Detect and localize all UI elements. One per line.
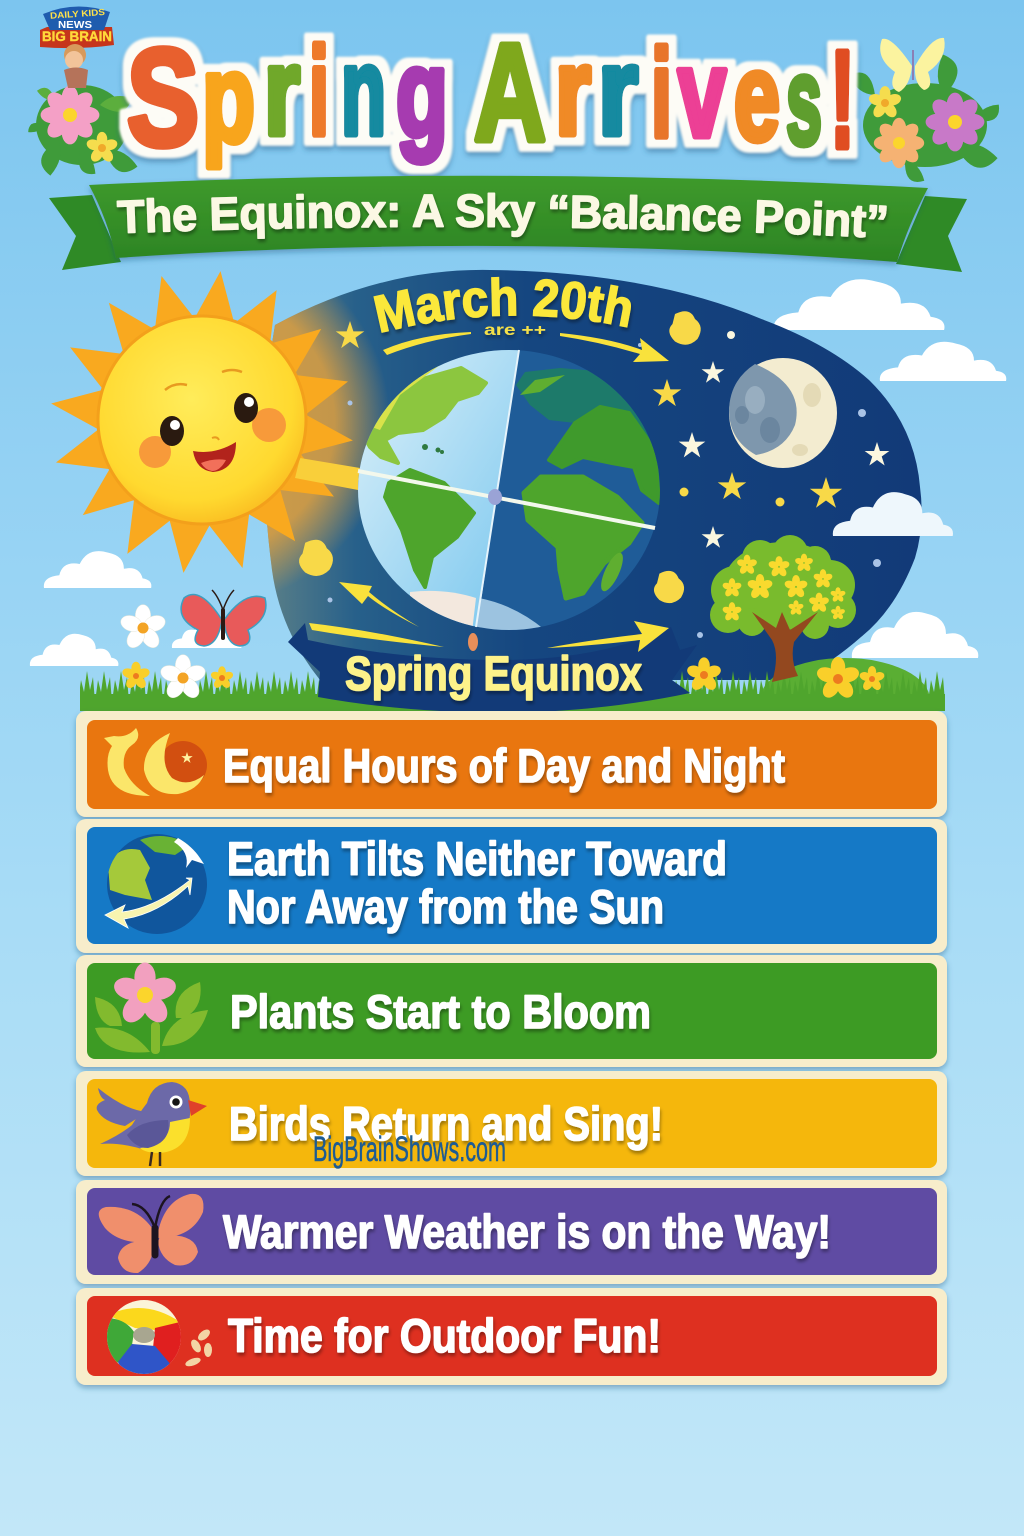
icon: mascot boy bbox=[64, 44, 88, 88]
blossoms bbox=[722, 554, 846, 622]
meadow flowers and butterfly bbox=[119, 590, 886, 701]
icon: pale butterfly bbox=[880, 38, 945, 92]
bar: earth tilts bbox=[76, 819, 947, 953]
label: Earth Tilts Neither Toward bbox=[227, 832, 727, 885]
title: Spring Arrives!: r bbox=[598, 23, 638, 161]
label: Warmer Weather is on the Way! bbox=[223, 1205, 831, 1258]
bar: plants start to bloom bbox=[76, 955, 947, 1067]
ribbon body bbox=[89, 176, 928, 262]
title: Spring Arrives!: A bbox=[474, 16, 546, 170]
icon: pink flower with leaves bbox=[95, 962, 208, 1054]
logo: Daily Kids News with Big Brain: DAILY KIDS bbox=[50, 7, 105, 21]
title: Spring Arrives!: v bbox=[678, 25, 726, 163]
bar: equal hours of day and night bbox=[76, 711, 947, 817]
sun glow on night panel bbox=[267, 297, 386, 588]
globe south pole ice bbox=[410, 591, 545, 632]
tree bbox=[710, 535, 856, 682]
title flowers right with butterfly bbox=[849, 38, 999, 184]
icon: crescent moons bbox=[104, 728, 207, 796]
bar: birds return and sing bbox=[76, 1071, 947, 1176]
date label: March 20th: are ++ bbox=[484, 322, 546, 339]
title: Spring Arrives!: i bbox=[309, 23, 329, 161]
label: Plants Start to Bloom bbox=[230, 985, 651, 1038]
clouds behind panel bbox=[30, 279, 1006, 666]
night sky panel bbox=[264, 270, 922, 680]
day night divider bbox=[476, 350, 519, 627]
ground: grass and hills bbox=[80, 658, 945, 742]
ribbon heading bbox=[118, 227, 888, 238]
label bbox=[227, 832, 727, 933]
label: Nor Away from the Sun bbox=[227, 880, 664, 933]
title: Spring Arrives!: g bbox=[396, 25, 448, 163]
globe centre pin bbox=[488, 489, 502, 505]
sun disc bbox=[98, 316, 306, 524]
icon: beach ball and nuts bbox=[107, 1300, 212, 1374]
icon: bird bbox=[97, 1082, 207, 1166]
logo: Daily Kids News with Big Brain: BIG BRAIN bbox=[42, 28, 112, 44]
equator line bbox=[358, 471, 655, 528]
continent: Africa bbox=[524, 477, 642, 598]
banner pin bbox=[468, 633, 478, 651]
arrow: top left swoosh bbox=[383, 332, 471, 355]
title: Spring Arrives!: s bbox=[786, 33, 822, 171]
bar: warmer weather bbox=[76, 1180, 947, 1284]
continent: North America bbox=[366, 368, 486, 463]
sun rays bbox=[33, 253, 371, 591]
title: Spring Arrives!: r bbox=[264, 23, 300, 161]
title: Spring Arrives!: e bbox=[734, 29, 780, 167]
spring equinox banner bbox=[288, 621, 697, 713]
logo: Daily Kids News with Big Brain bbox=[40, 6, 114, 88]
logo: Daily Kids News with Big Brain: NEWS bbox=[58, 20, 92, 31]
banner arrows bbox=[309, 621, 669, 652]
title flowers left bbox=[28, 85, 138, 178]
banner label: Spring Equinox bbox=[345, 648, 642, 701]
bar: time for outdoor fun bbox=[76, 1288, 947, 1385]
stars and dots bbox=[299, 311, 889, 638]
title: Spring Arrives!: ! bbox=[830, 23, 855, 177]
watermark: BigBrainShows.com bbox=[313, 1130, 506, 1169]
title: Spring Arrives!: r bbox=[555, 23, 591, 161]
icon: orange butterfly bbox=[99, 1194, 203, 1273]
clouds over panel bbox=[833, 492, 978, 658]
title: Spring Arrives! bbox=[127, 16, 855, 177]
title: Spring Arrives!: S bbox=[127, 21, 199, 175]
icon: red butterfly bbox=[181, 590, 266, 646]
icon: earth with arrows bbox=[105, 834, 207, 934]
top right dark land bbox=[516, 368, 655, 450]
title: Spring Arrives!: i bbox=[651, 25, 672, 163]
Caribbean islands bbox=[422, 444, 444, 454]
ribbon tails bbox=[49, 195, 967, 272]
crown bbox=[710, 535, 856, 639]
globe bbox=[340, 345, 660, 635]
ribbon banner: The Equinox: A Sky “Balance Point” bbox=[116, 192, 889, 244]
title: Spring Arrives!: p bbox=[202, 30, 255, 168]
trunk bbox=[752, 612, 818, 682]
label: Equal Hours of Day and Night bbox=[223, 739, 785, 792]
sun beam to globe bbox=[295, 458, 360, 490]
sun with face bbox=[33, 253, 371, 591]
moon bbox=[729, 358, 837, 468]
label: Birds Return and Sing! bbox=[229, 1097, 663, 1150]
globe daylight half bbox=[358, 350, 518, 627]
label: Time for Outdoor Fun! bbox=[228, 1309, 661, 1362]
title: Spring Arrives!: n bbox=[341, 23, 386, 161]
arrow: top right bbox=[560, 333, 669, 362]
ribbon banner bbox=[49, 176, 967, 272]
arrows around globe bbox=[339, 332, 669, 627]
sun face bbox=[139, 370, 286, 472]
date label: March 20th: March 20th bbox=[373, 276, 634, 337]
continent: South America bbox=[385, 470, 474, 587]
arrow: lower left bbox=[339, 582, 419, 627]
continent: Europe Asia bbox=[549, 407, 659, 503]
